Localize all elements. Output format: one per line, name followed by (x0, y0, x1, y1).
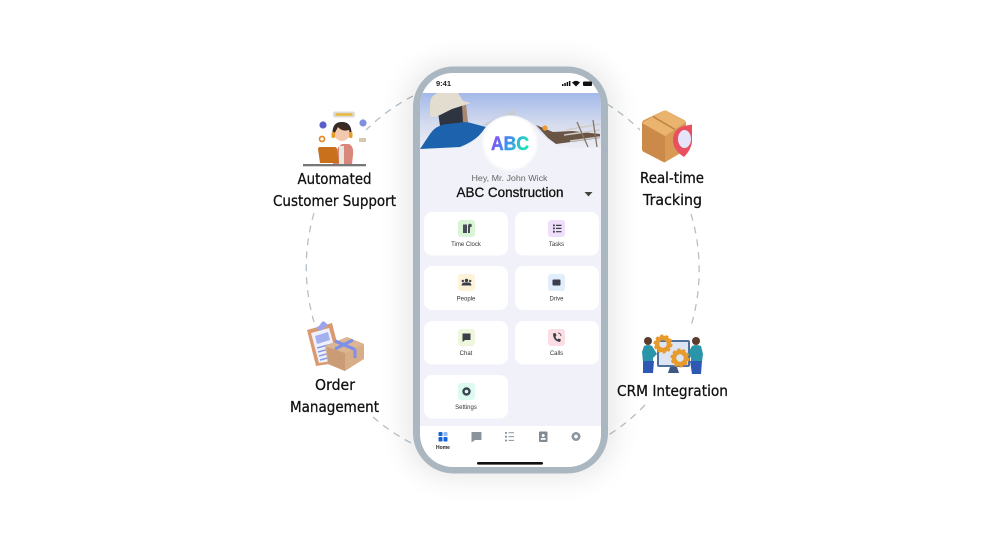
infographic canvas (274, 58, 727, 482)
status time: 9:41 (436, 79, 451, 88)
tab: Contacts (539, 432, 548, 442)
card: People: People (457, 296, 476, 302)
phone screen (420, 73, 601, 467)
feature: Real-time Tracking (640, 110, 704, 209)
greeting: Hey, Mr. John Wick (472, 174, 548, 183)
label: Real-time (640, 169, 704, 187)
tab: Home: Home (436, 445, 450, 451)
card: Calls (515, 321, 599, 364)
card: Time Clock (424, 212, 508, 256)
banner photo (420, 93, 601, 149)
status bar (420, 73, 601, 93)
construction scaffolding (536, 120, 600, 147)
logo circle (482, 115, 538, 171)
banner wave cut (469, 116, 554, 144)
card: Tasks (515, 212, 599, 256)
status icons (562, 81, 592, 86)
dropdown caret (584, 192, 592, 196)
tab bar (420, 426, 601, 467)
tab: Settings (573, 433, 579, 440)
feature: Order Management (290, 321, 379, 416)
card: Chat: Chat (460, 351, 473, 357)
worker shirt (420, 122, 486, 149)
tab: Tasks (505, 432, 514, 441)
feature: Real-time Tracking: Tracking (642, 191, 702, 209)
phone shadow (405, 62, 615, 478)
card: Drive: Drive (549, 296, 564, 302)
card: People (424, 266, 508, 310)
icon: parcel with location pin (642, 110, 692, 162)
logo text: ABC (491, 133, 529, 155)
dashed orbit connecting features (306, 96, 699, 444)
phone mockup (416, 70, 604, 470)
label: CRM Integration (617, 382, 728, 400)
screen body (420, 93, 601, 427)
feature: Automated Customer Support: Customer Support (273, 192, 396, 210)
worker neck and hair (438, 106, 466, 126)
rolled blueprint (482, 108, 516, 126)
card: Chat (424, 321, 508, 364)
label: Automated (298, 170, 372, 188)
feature: Order Management: Management (290, 398, 379, 416)
icon: team with monitor and gears (642, 336, 703, 374)
label: Order (315, 376, 356, 394)
feature: Automated Customer Support (273, 112, 396, 210)
icon: support agent (303, 112, 367, 166)
phone frame (416, 70, 604, 470)
icon: clipboard and parcel (307, 321, 364, 371)
card: Tasks: Tasks (549, 242, 564, 248)
tab: Chat (472, 432, 482, 442)
feature: CRM Integration (617, 336, 728, 400)
card: Drive (515, 266, 599, 310)
worker hard hat (430, 93, 471, 117)
card: Settings: Settings (455, 405, 477, 411)
card: Settings (424, 375, 508, 418)
company name: ABC Construction (456, 184, 564, 200)
home indicator (477, 462, 543, 465)
card: Calls: Calls (550, 351, 563, 357)
card: Time Clock: Time Clock (451, 242, 482, 248)
tab: Home (436, 432, 450, 451)
